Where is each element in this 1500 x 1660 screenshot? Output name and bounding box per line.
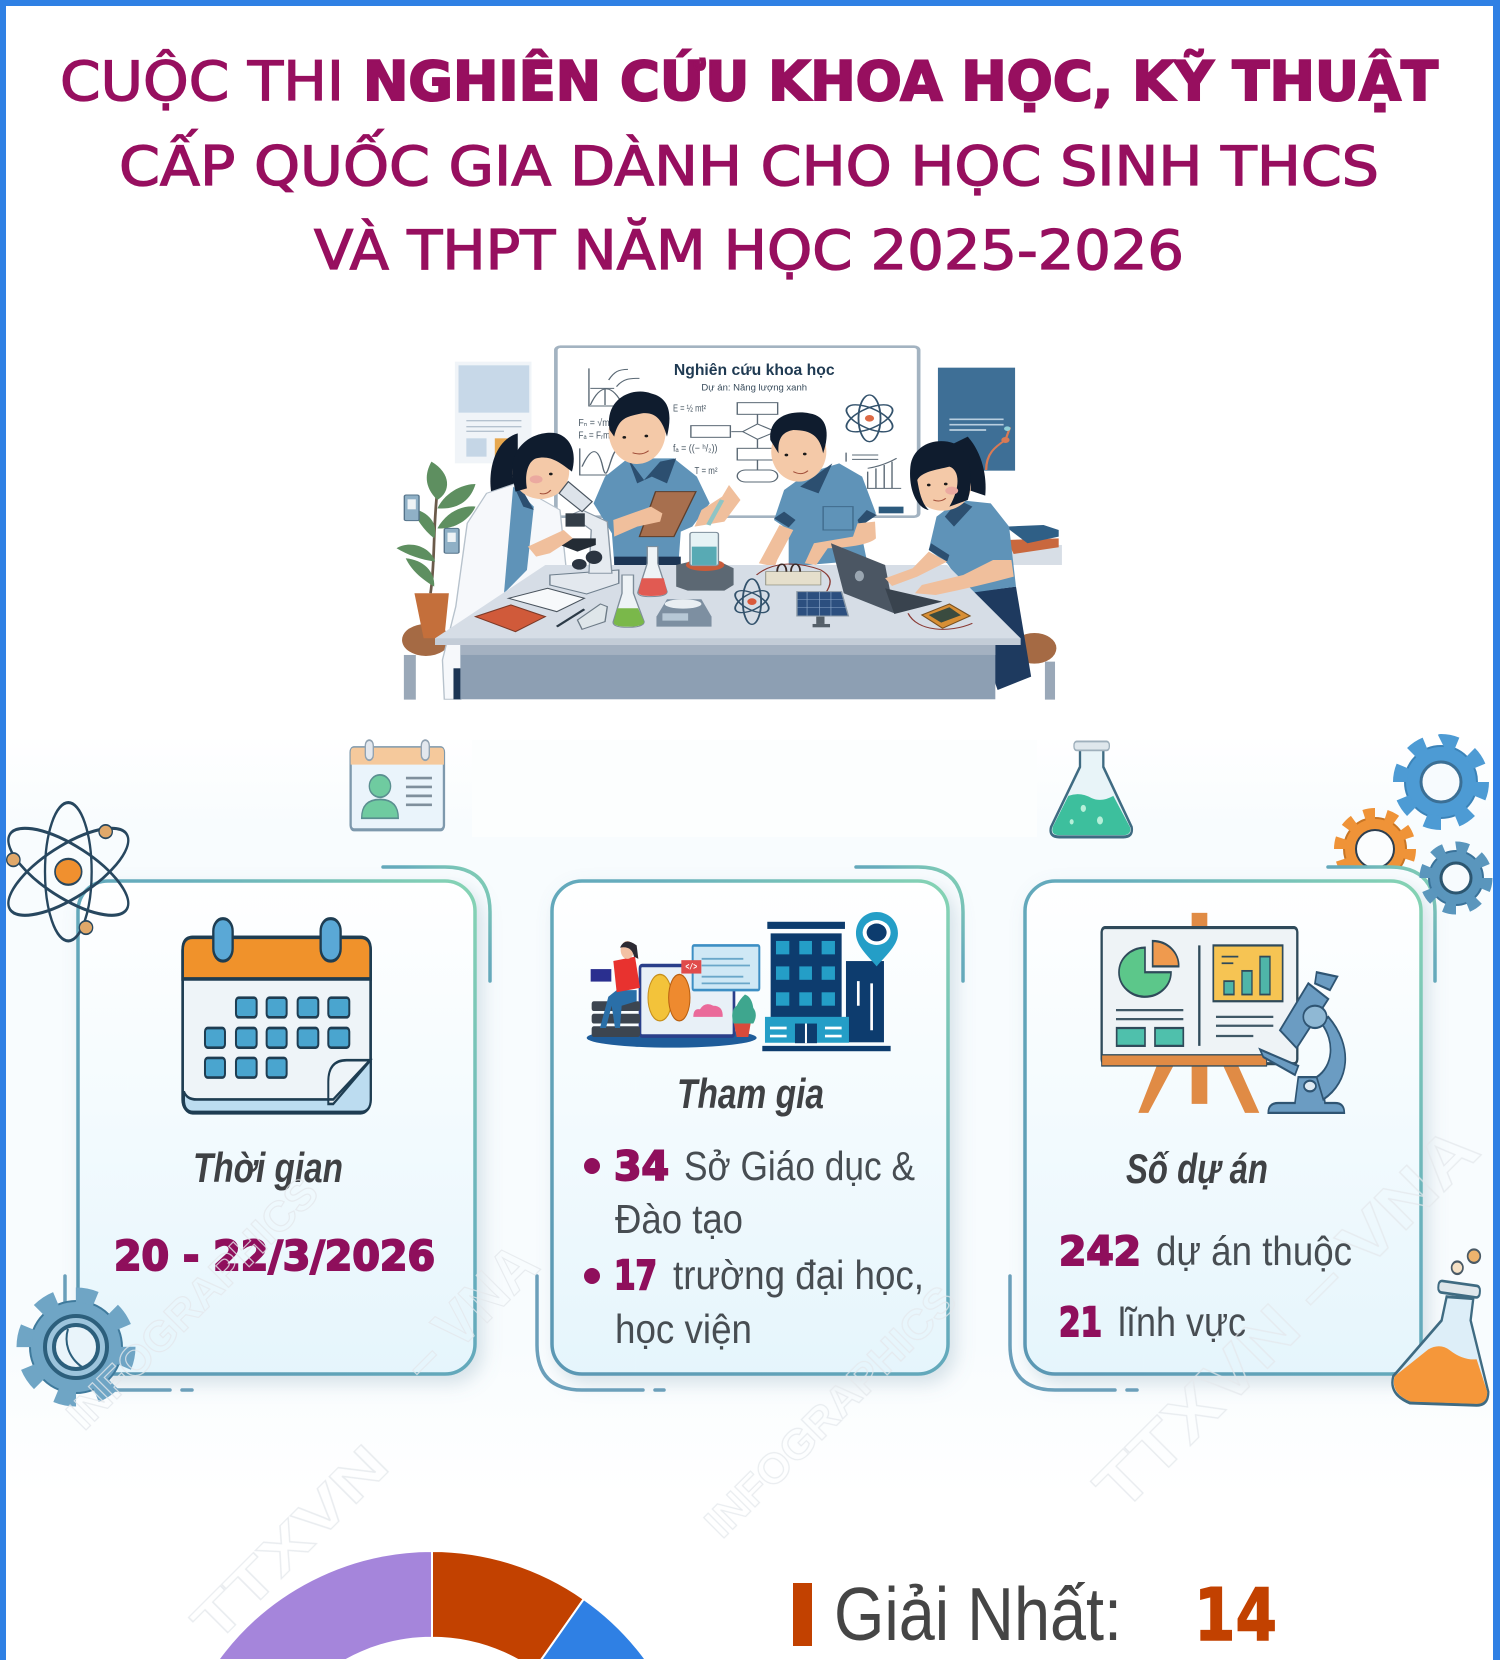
- student right of centre: [759, 412, 877, 567]
- list: participants: trường đại học,: [673, 1252, 924, 1298]
- watermarks: [57, 1111, 1493, 1653]
- title: VÀ THPT NĂM HỌC 2025-2026: [314, 218, 1184, 282]
- lab glassware and instruments on the table: [476, 532, 848, 632]
- projects count: dự án thuộc: [1156, 1228, 1352, 1274]
- icon: ID card: [351, 740, 444, 830]
- whiteboard: Nghiên cứu khoa học: [674, 361, 835, 378]
- watermarks: TTXVN – VNA: [1080, 1111, 1493, 1524]
- whiteboard: Fₙ = √m: [578, 417, 610, 428]
- icon: large blue gear: [1400, 741, 1482, 823]
- legend: first prize: Giải Nhất:: [834, 1572, 1122, 1656]
- icon: building with location pin: [762, 912, 898, 1051]
- watermarks: TTXVN: [179, 1432, 400, 1653]
- list: participants: Đào tạo: [615, 1196, 743, 1242]
- date value: 20 - 22/3/2026: [114, 1232, 435, 1280]
- title: [60, 50, 1438, 282]
- donut slice: second prize: [541, 1599, 646, 1660]
- legend: first prize: 14: [1194, 1573, 1277, 1657]
- card 3 outer accent: [1010, 867, 1435, 1390]
- heading: Tham gia: Tham gia: [677, 1070, 824, 1117]
- icon: atom: [1, 803, 136, 941]
- potted plant with sensors: [397, 462, 476, 638]
- illustration: students doing science research: [397, 347, 1062, 700]
- projects count: 242: [1059, 1229, 1141, 1275]
- card 2 outer accent: [537, 867, 963, 1390]
- right wall poster: [938, 368, 1015, 471]
- donut slice: first prize: [432, 1551, 584, 1660]
- stools: [402, 624, 1056, 700]
- projects count: lĩnh vực: [1118, 1299, 1246, 1345]
- watermarks: – VNA: [387, 1230, 551, 1394]
- microscope: [528, 482, 619, 594]
- student on right, body: [910, 437, 1031, 690]
- icon: green flask: [1051, 741, 1132, 837]
- icon: blue-grey gear bottom left: [24, 1295, 128, 1399]
- title: CẤP QUỐC GIA DÀNH CHO HỌC SINH THCS: [119, 130, 1379, 198]
- left wall poster: [455, 362, 532, 463]
- panel: participants card: [552, 881, 948, 1374]
- panel: time card: [78, 881, 475, 1374]
- icon: orange flask: [1392, 1249, 1488, 1405]
- icon: orange gear: [1340, 814, 1410, 884]
- donut slice: other prize: [218, 1551, 432, 1660]
- title: NGHIÊN CỨU KHOA HỌC, KỸ THUẬT: [363, 50, 1438, 113]
- list: participants: 34: [614, 1144, 669, 1190]
- whiteboard: Fₐ = Fᵣml: [578, 430, 612, 441]
- list: participants: 17: [614, 1253, 657, 1299]
- table: [435, 565, 1021, 699]
- legend: first prize: [793, 1572, 1277, 1657]
- whiteboard: fₐ = ((− ʰ/₂)): [673, 443, 718, 454]
- whiteboard: T = m²: [695, 465, 718, 476]
- list: participants: [584, 1143, 924, 1352]
- whiteboard: Dự án: Năng lượng xanh: [701, 383, 807, 393]
- heading: Thời gian: Thời gian: [193, 1144, 343, 1191]
- list: participants: Sở Giáo dục &: [684, 1143, 915, 1189]
- title: CUỘC THI: [60, 50, 344, 113]
- student standing centre-left with clipboard: [594, 392, 740, 567]
- heading: Số dự án: Số dự án: [1126, 1145, 1268, 1192]
- panel: projects card: [1025, 881, 1421, 1374]
- arms of student on right: [885, 552, 1014, 595]
- projects count: 21: [1059, 1300, 1102, 1346]
- student in lab coat: [442, 433, 574, 699]
- list: participants: học viện: [615, 1306, 752, 1352]
- watermarks: INFOGRAPHICS: [695, 1276, 965, 1546]
- icon: presentation easel with microscope: [1102, 913, 1345, 1113]
- donut chart: [218, 1551, 646, 1660]
- watermarks: INFOGRAPHICS: [57, 1168, 327, 1438]
- laptop and multimeter: [831, 543, 972, 629]
- icon: person with laptop and brain screen: </>: [685, 963, 698, 973]
- icon: person with laptop and brain screen: [587, 941, 759, 1048]
- books on shelf: [1005, 525, 1062, 565]
- icon: calendar: [183, 919, 371, 1113]
- whiteboard: [556, 347, 919, 517]
- icon: small blue gear: [1425, 847, 1487, 909]
- card 1 outer accent: [65, 867, 490, 1390]
- whiteboard: E = ½ mt²: [673, 403, 706, 414]
- projects count: [1059, 1228, 1352, 1346]
